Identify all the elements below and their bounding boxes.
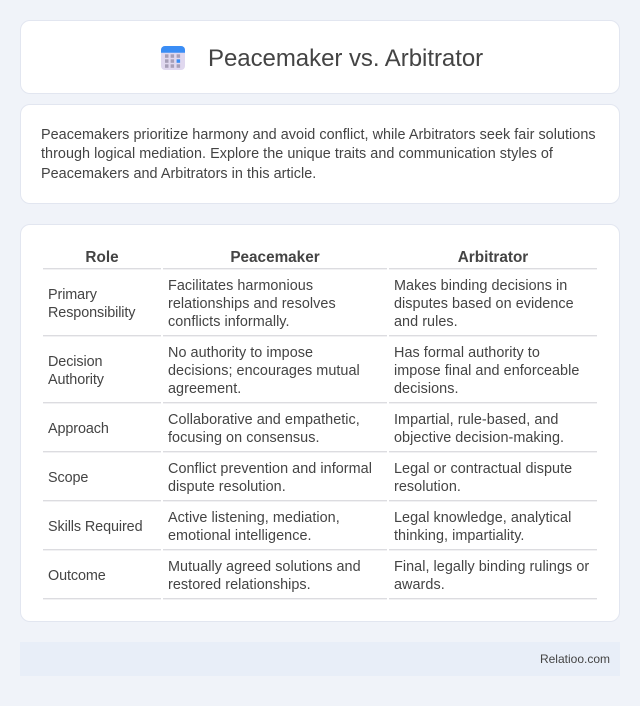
table header row: Role — [85, 249, 119, 266]
row: decision authority: Has formal authority to — [394, 345, 540, 361]
row: decision authority: Decision — [48, 354, 102, 370]
row: scope: resolution. — [394, 479, 461, 495]
row: decision authority: decisions; encourages mutual — [168, 363, 360, 379]
row: skills required: Active listening, mediation, — [168, 510, 340, 526]
row: decision authority: agreement. — [168, 381, 241, 397]
row: outcome — [43, 559, 597, 600]
row: outcome: Mutually agreed solutions and — [168, 559, 361, 575]
table header row — [43, 249, 597, 270]
footer credit: Relatioo.com — [540, 652, 610, 666]
row: primary responsibility: conflicts informally. — [168, 314, 290, 330]
row: outcome: awards. — [394, 577, 445, 593]
row: decision authority — [43, 345, 597, 404]
row: skills required: Skills Required — [48, 519, 142, 535]
row: scope: Legal or contractual dispute — [394, 461, 572, 477]
row: primary responsibility — [43, 278, 597, 337]
row: primary responsibility: and rules. — [394, 314, 458, 330]
header panel — [20, 20, 620, 94]
intro text: through logical mediation. Explore the unique traits and communication styles of — [41, 146, 553, 162]
row: primary responsibility: Facilitates harmonious — [168, 278, 313, 294]
icon: calendar — [161, 46, 185, 70]
row: approach: Impartial, rule-based, and — [394, 412, 558, 428]
comparison table — [43, 249, 597, 600]
row: skills required: emotional intelligence. — [168, 528, 312, 544]
row: skills required: thinking, impartiality. — [394, 528, 524, 544]
row: decision authority: impose final and enforceable — [394, 363, 579, 379]
row: decision authority: No authority to impose — [168, 345, 313, 361]
row: primary responsibility: Responsibility — [48, 305, 135, 321]
row: approach: objective decision-making. — [394, 430, 564, 446]
row: primary responsibility: disputes based on evidence — [394, 296, 574, 312]
row: decision authority: decisions. — [394, 381, 458, 397]
row: primary responsibility: Primary — [48, 287, 97, 303]
row: skills required — [43, 510, 597, 551]
intro text — [41, 127, 596, 182]
row: outcome: restored relationships. — [168, 577, 311, 593]
row: primary responsibility: Makes binding decisions in — [394, 278, 567, 294]
row: outcome: Outcome — [48, 568, 106, 584]
row: primary responsibility: relationships and resolves — [168, 296, 336, 312]
intro text: Peacemakers prioritize harmony and avoid conflict, while Arbitrators seek fair solutions — [41, 127, 596, 143]
row: decision authority: Authority — [48, 372, 104, 388]
intro panel — [20, 104, 620, 204]
row: approach — [43, 412, 597, 453]
row: approach: Approach — [48, 421, 109, 437]
table header row: Arbitrator — [458, 249, 528, 266]
row: skills required: Legal knowledge, analytical — [394, 510, 571, 526]
row: scope: dispute resolution. — [168, 479, 286, 495]
row: outcome: Final, legally binding rulings or — [394, 559, 589, 575]
row: scope: Conflict prevention and informal — [168, 461, 372, 477]
comparison table panel — [20, 224, 620, 622]
footer bar — [20, 642, 620, 676]
row: scope — [43, 461, 597, 502]
row: scope: Scope — [48, 470, 88, 486]
intro text: Peacemakers and Arbitrators in this article. — [41, 166, 316, 182]
table header row: Peacemaker — [230, 249, 320, 266]
title: Peacemaker vs. Arbitrator — [208, 45, 483, 72]
row: approach: focusing on consensus. — [168, 430, 320, 446]
row: approach: Collaborative and empathetic, — [168, 412, 360, 428]
